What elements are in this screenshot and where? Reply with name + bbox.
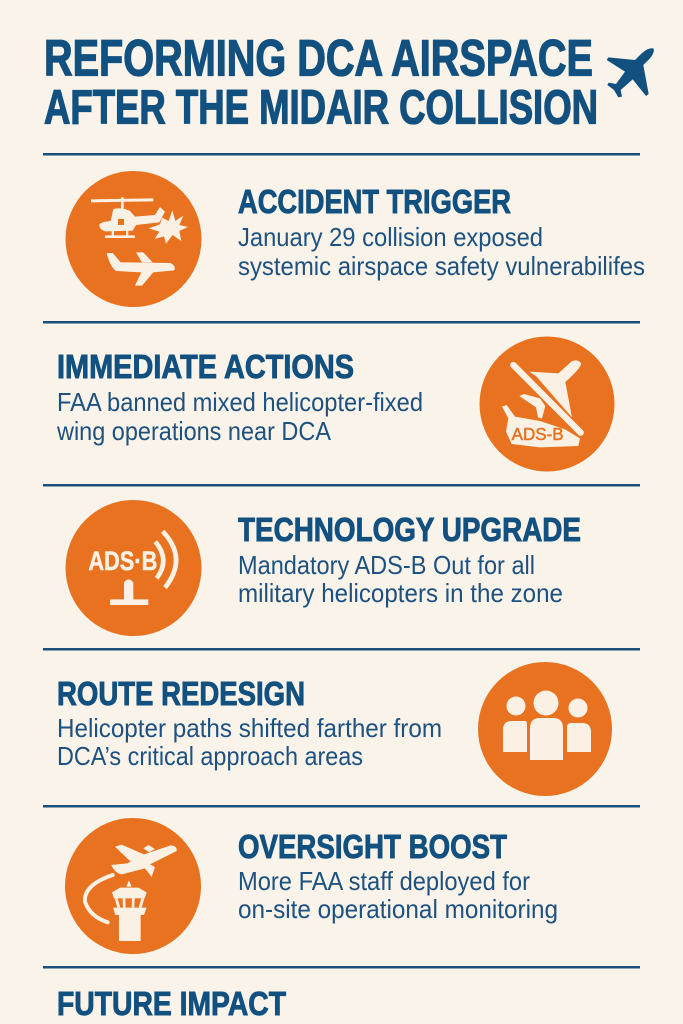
body text (238, 866, 558, 924)
body text (238, 550, 563, 608)
panel: oversight boost (65, 818, 558, 954)
body text: systemic airspace safety vulnerabilifes (238, 251, 645, 281)
heading: future impact: FUTURE IMPACT (57, 985, 286, 1022)
heading: ACCIDENT TRIGGER (238, 183, 511, 220)
body text: wing operations near DCA (56, 416, 332, 446)
panel: route redesign (57, 662, 612, 796)
body text: DCA’s critical approach areas (57, 741, 363, 771)
icon: control tower and plane (65, 818, 201, 954)
body text: More FAA staff deployed for (238, 866, 530, 896)
title (44, 30, 598, 134)
icon: helicopter and plane collision (66, 171, 202, 307)
icon: airplane (607, 48, 654, 97)
heading: TECHNOLOGY UPGRADE (238, 511, 581, 548)
body text (56, 387, 423, 446)
icon: group of people (478, 662, 612, 796)
body text (238, 222, 645, 281)
body text: January 29 collision exposed (238, 222, 543, 252)
heading: OVERSIGHT BOOST (238, 828, 507, 865)
icon: banned aircraft with ADS-B (480, 336, 614, 472)
body text: Helicopter paths shifted farther from (57, 713, 442, 743)
panel: accident trigger (66, 171, 645, 307)
panel: technology upgrade (66, 500, 581, 636)
body text: FAA banned mixed helicopter-fixed (57, 387, 423, 417)
body text (57, 713, 442, 771)
icon: banned aircraft with ADS-B: ADS-B (512, 424, 564, 444)
body text: on-site operational monitoring (238, 894, 558, 924)
icon: ADS-B antenna (66, 500, 202, 636)
icon: ADS-B antenna: ADS·B (88, 546, 157, 576)
body text: military helicopters in the zone (238, 578, 563, 608)
heading: IMMEDIATE ACTIONS (57, 348, 354, 385)
heading: ROUTE REDESIGN (57, 675, 305, 712)
panel: immediate actions (56, 336, 615, 472)
body text: Mandatory ADS-B Out for all (238, 550, 535, 580)
